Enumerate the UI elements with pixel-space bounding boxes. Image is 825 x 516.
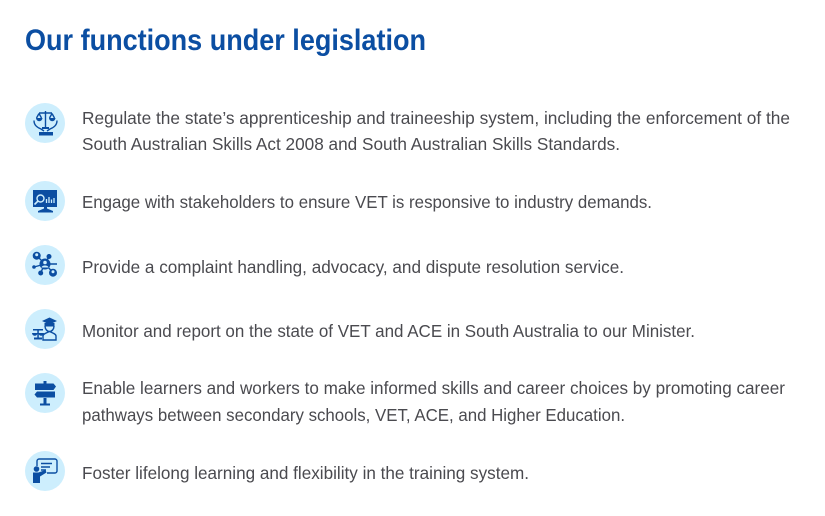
list item: engage (25, 181, 652, 221)
list item: complaint handling (25, 245, 624, 285)
icon: scales held in hands (25, 103, 65, 143)
title: Our functions under legislation (25, 24, 426, 57)
icon: signpost (25, 373, 65, 413)
text: enable learners line 2: pathways between secondary schools, VET, ACE, and Higher Education. (82, 405, 625, 425)
text: complaint handling: Provide a complaint handling, advocacy, and dispute resolution service. (82, 257, 624, 277)
text: engage: Engage with stakeholders to ensure VET is responsive to industry demands. (82, 192, 652, 212)
list item: enable learners (25, 373, 785, 425)
list item: monitor and report (25, 309, 695, 349)
icon: graduate with scales (25, 309, 65, 349)
list item: lifelong learning (25, 451, 529, 491)
text: regulate line 2: South Australian Skills Act 2008 and South Australian Skills Standards. (82, 134, 620, 154)
text: monitor and report: Monitor and report on the state of VET and ACE in South Australia to our Minister. (82, 321, 695, 341)
list item: regulate (25, 103, 790, 154)
icon: presentation screen with magnifier (25, 181, 65, 221)
icon: teacher at board (25, 451, 65, 491)
text: enable learners: Enable learners and workers to make informed skills and career choices by promoting career (82, 378, 785, 398)
text: regulate: Regulate the state’s apprenticeship and traineeship system, including the enforcement of the (82, 108, 790, 128)
icon: connected people network (25, 245, 65, 285)
text: lifelong learning: Foster lifelong learning and flexibility in the training system. (82, 463, 529, 483)
